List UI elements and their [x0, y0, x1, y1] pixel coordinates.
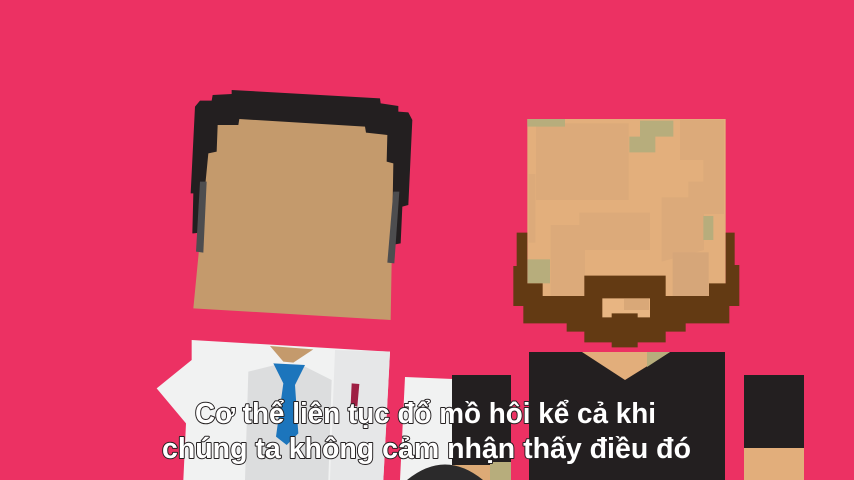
left character: head with black hair	[191, 90, 412, 320]
subtitle	[162, 398, 691, 465]
subtitle: chúng ta không cảm nhận thấy điều đó	[162, 433, 691, 465]
left character: second white sleeve	[400, 377, 453, 480]
left character: white shirt with tie and pen	[157, 340, 390, 480]
subtitle: Cơ thể liên tục đổ mồ hôi kể cả khi	[195, 398, 656, 430]
right character: black left sleeve with arm	[452, 375, 511, 480]
dark round object at the bottom	[407, 464, 483, 480]
mouth	[602, 298, 650, 317]
beard	[513, 233, 739, 347]
right character: right sleeve with arm	[744, 375, 804, 480]
right character: black shirt with V neck	[529, 352, 725, 480]
right character: bearded head	[513, 119, 739, 347]
